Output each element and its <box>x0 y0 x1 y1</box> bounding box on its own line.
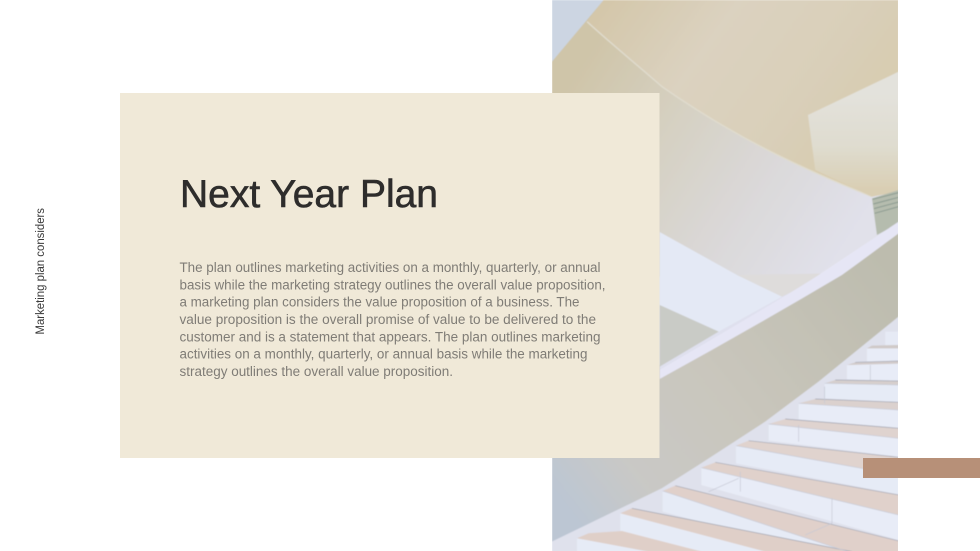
body text: customer and is a statement that appears. The plan outlines marketing <box>180 329 600 344</box>
steps from top to bottom <box>886 332 898 344</box>
body text: The plan outlines marketing activities on a monthly, quarterly, or annual <box>180 260 601 275</box>
title: Next Year Plan <box>180 173 438 216</box>
body text <box>180 260 606 379</box>
panel: beige text card <box>120 93 660 458</box>
accent bar <box>863 458 980 478</box>
photo: spiral marble staircase <box>552 0 899 551</box>
body text: strategy outlines the overall value proposition. <box>180 364 453 379</box>
side label: Marketing plan considers <box>35 208 47 334</box>
body text: value proposition is the overall promise of value to be delivered to the <box>180 312 596 327</box>
lower photo: rail, balustrade, steps <box>552 222 899 551</box>
body text: basis while the marketing strategy outlines the overall value proposition, <box>180 277 606 292</box>
body text: activities on a monthly, quarterly, or annual basis while the marketing <box>180 347 588 362</box>
upper photo: ceiling and wall <box>552 0 899 277</box>
body text: a marketing plan considers the value proposition of a business. The <box>180 295 580 310</box>
